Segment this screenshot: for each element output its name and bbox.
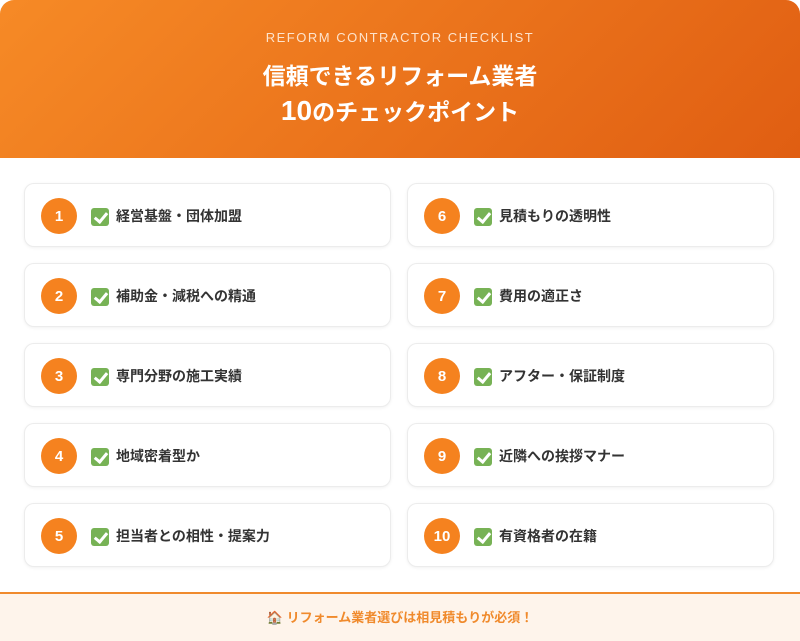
card 8 bbox=[407, 343, 774, 407]
card 2 bbox=[24, 263, 391, 327]
card 9 bbox=[407, 423, 774, 487]
card 3: 3 bbox=[55, 368, 63, 385]
card 3 bbox=[24, 343, 391, 407]
card 6 bbox=[407, 183, 774, 247]
card 5 bbox=[24, 503, 391, 567]
card 3: 専門分野の施工実績 bbox=[116, 368, 242, 384]
card 7: 7 bbox=[438, 288, 446, 305]
card 10 bbox=[407, 503, 774, 567]
footer note bbox=[0, 592, 800, 641]
card 5: 担当者との相性・提案力 bbox=[116, 528, 270, 544]
card 4: 地域密着型か bbox=[116, 448, 200, 464]
card 7: 費用の適正さ bbox=[499, 288, 583, 304]
card 9: 近隣への挨拶マナー bbox=[499, 448, 625, 464]
card 1: 1 bbox=[55, 208, 63, 225]
title line 1: 信頼できるリフォーム業者 bbox=[263, 63, 537, 89]
card 6: 見積もりの透明性 bbox=[499, 208, 611, 224]
title line 2: 10のチェックポイント bbox=[281, 95, 519, 126]
card 5: 5 bbox=[55, 528, 63, 545]
card 9: 9 bbox=[438, 448, 446, 465]
card 2: 2 bbox=[55, 288, 63, 305]
card 6: 6 bbox=[438, 208, 446, 225]
card 4: 4 bbox=[55, 448, 63, 465]
card 8: 8 bbox=[438, 368, 446, 385]
subtitle: REFORM CONTRACTOR CHECKLIST bbox=[266, 30, 534, 45]
card 1 bbox=[24, 183, 391, 247]
footer note: 🏠 リフォーム業者選びは相見積もりが必須！ bbox=[267, 610, 533, 625]
card 1: 経営基盤・団体加盟 bbox=[116, 208, 242, 224]
header bbox=[0, 0, 800, 158]
card 7 bbox=[407, 263, 774, 327]
card 4 bbox=[24, 423, 391, 487]
card 10: 10 bbox=[434, 528, 450, 545]
card 2: 補助金・減税への精通 bbox=[116, 288, 256, 304]
card 8: アフター・保証制度 bbox=[499, 368, 625, 384]
card 10: 有資格者の在籍 bbox=[499, 528, 597, 544]
